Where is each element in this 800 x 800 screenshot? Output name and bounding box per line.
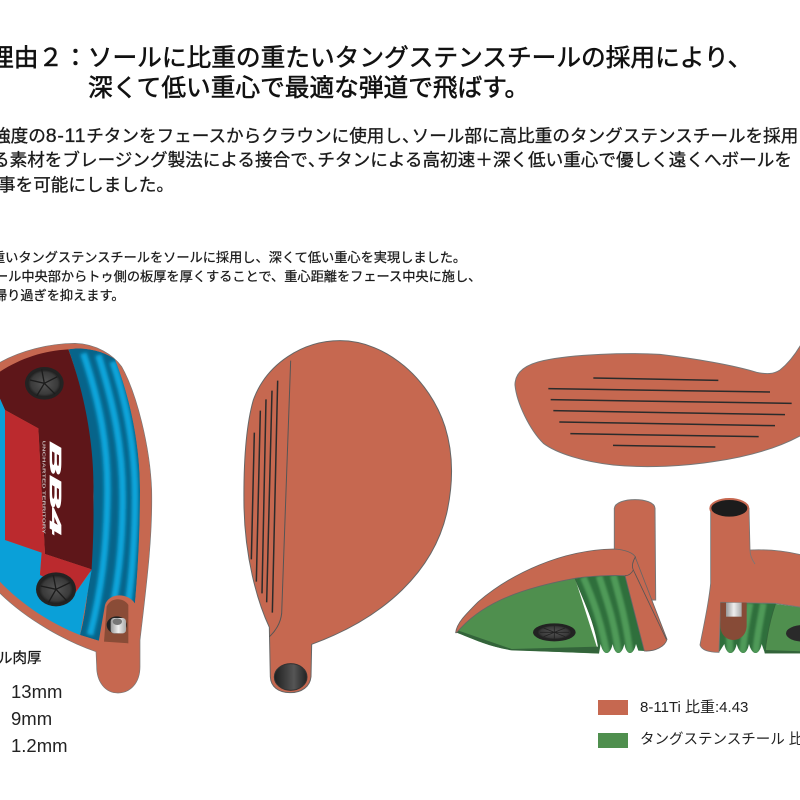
body text: る素材をブレージング製法による接合で、チタンによる高初速＋深く低い重心で優しく遠くへボールを [0, 150, 792, 170]
body text [0, 125, 798, 195]
heading: 深くて低い重心で最適な弾道で飛ばす。 [88, 75, 529, 102]
cutaway right: fold line [750, 550, 755, 564]
cutaway left: rib edge line [575, 578, 599, 647]
cutaway right: ribs [719, 602, 776, 654]
thickness legend: 13mm [11, 681, 62, 702]
thickness legend: 9mm [11, 708, 52, 729]
sole: hosel pocket [99, 595, 135, 645]
cutaway right: rib divider [765, 603, 776, 653]
cutaway left: ribs [576, 576, 644, 654]
cutaway left: tungsten sole [457, 578, 599, 654]
crown: face edge line [269, 361, 291, 637]
cutaway views [456, 499, 800, 657]
heading [0, 44, 752, 102]
cutaway left: weight screw [533, 623, 576, 641]
cutaway left: face fold line [625, 557, 666, 639]
cutaway left: crown shell [456, 549, 667, 651]
cutaway right: lower band [765, 650, 800, 653]
crown view of club head [244, 341, 451, 693]
sole description text: 重いタングステンスチールをソールに採用し、深くて低い重心を実現しました。 [0, 250, 466, 265]
cutaway right: crown shell and hosel [700, 508, 800, 652]
sole: dark red panel [0, 349, 94, 569]
sole: screw weight lower [36, 572, 76, 606]
cutaway right: weight screw [786, 625, 800, 642]
sole: cyan panels [0, 395, 92, 635]
sole description text: ール中央部からトゥ側の板厚を厚くすることで、重心距離をフェース中央に施し、 [0, 269, 481, 284]
crown: score lines [251, 381, 278, 613]
sole: screw weight upper [25, 367, 64, 400]
cutaway left: sole lower band [457, 630, 599, 653]
cutaway right: tungsten sole [765, 603, 800, 653]
body text: 強度の8-11チタンをフェースからクラウンに使用し、ソール部に高比重のタングステンスチールを採用 [0, 125, 798, 147]
thickness legend [0, 650, 68, 756]
body text: 事を可能にしました。 [0, 175, 174, 195]
face view of club head [515, 343, 800, 467]
thickness legend: 1.2mm [11, 735, 68, 756]
cutaway left: hosel [614, 500, 656, 600]
sole: outer shell [0, 343, 152, 693]
crown: body [244, 341, 451, 693]
heading: 理由２：ソールに比重の重たいタングステンスチールの採用により、 [0, 45, 752, 72]
face: body [515, 343, 800, 467]
sole view of club head [0, 343, 152, 693]
sole: BB4 logo: BB4 [46, 442, 63, 535]
sole: tagline: UNCHARTED TERRITORY [41, 441, 47, 535]
sole: blue rear channel [68, 349, 140, 642]
face: score lines [548, 378, 792, 447]
cutaway right: weight pocket [720, 603, 747, 640]
material legend: titanium: 8-11Ti 比重:4.43 [640, 699, 748, 716]
cutaway right: hosel opening [710, 499, 748, 518]
sole description text [0, 250, 481, 303]
crown: hosel hole [274, 664, 307, 690]
cutaway right: silver screw [726, 603, 742, 617]
sole: red panel [5, 410, 92, 593]
